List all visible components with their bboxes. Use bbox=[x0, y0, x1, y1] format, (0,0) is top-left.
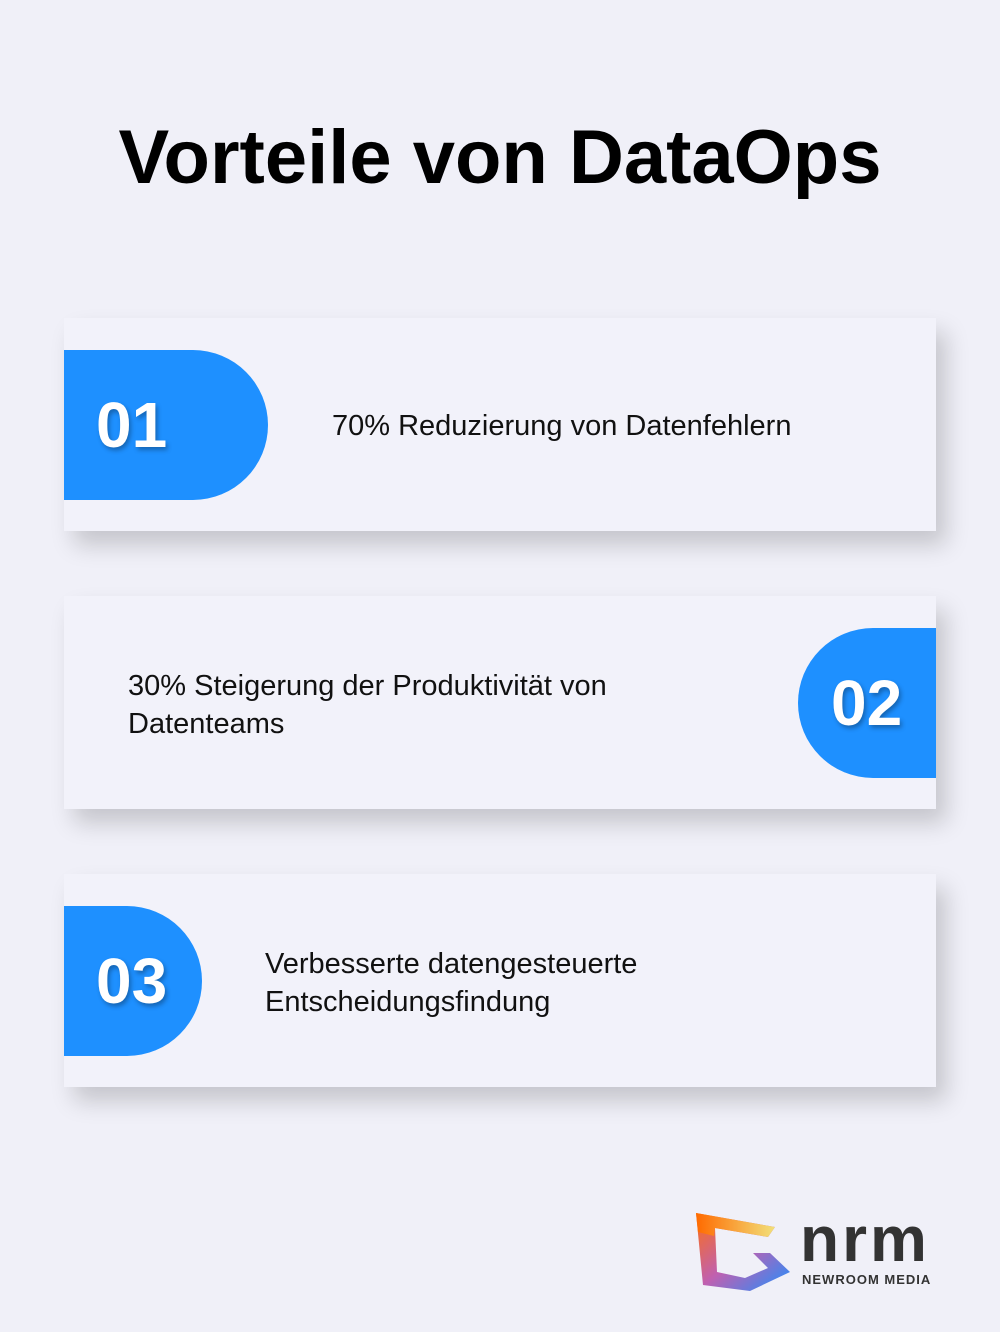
badge 01: 01 bbox=[96, 389, 167, 461]
logo bbox=[696, 1203, 931, 1291]
badge 03: 03 bbox=[96, 945, 167, 1017]
badge 03 bbox=[64, 906, 202, 1056]
panel: card 1 bbox=[64, 318, 936, 531]
logo text: nrm bbox=[800, 1203, 930, 1275]
text 2: 30% Steigerung der Produktivität von bbox=[128, 670, 607, 702]
badge 02: 02 bbox=[831, 667, 902, 739]
text 2: Datenteams bbox=[128, 708, 284, 740]
badge 02 bbox=[798, 628, 936, 778]
panel: card 2 bbox=[64, 596, 936, 809]
logo: NEWROOM MEDIA bbox=[802, 1272, 931, 1287]
text 3: Entscheidungsfindung bbox=[265, 986, 550, 1018]
panel: card 3 bbox=[64, 874, 936, 1087]
badge 01 bbox=[64, 350, 268, 500]
text 3: Verbesserte datengesteuerte bbox=[265, 948, 637, 980]
text 1: 70% Reduzierung von Datenfehlern bbox=[332, 410, 791, 442]
text 2 bbox=[128, 670, 607, 740]
title: Vorteile von DataOps bbox=[118, 115, 882, 200]
text 3 bbox=[265, 948, 637, 1018]
icon: logo mark bbox=[696, 1213, 790, 1291]
